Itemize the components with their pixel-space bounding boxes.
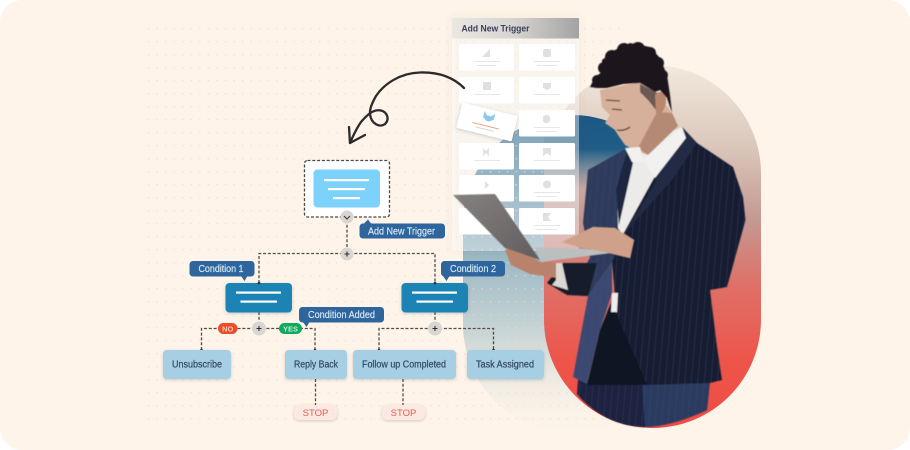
tooltip: add new trigger xyxy=(360,220,445,238)
node: unsubscribe xyxy=(163,350,231,379)
blue arch backdrop xyxy=(463,115,681,433)
trigger node xyxy=(304,160,390,217)
trousers xyxy=(577,380,710,427)
panel heading: Add New Trigger xyxy=(462,24,530,34)
panel header xyxy=(452,18,579,38)
card icons and lines xyxy=(474,49,560,230)
collar xyxy=(625,147,644,163)
eye and brow xyxy=(606,100,622,110)
node: reply back xyxy=(285,350,347,379)
red gradient pill backdrop xyxy=(544,65,761,428)
flow connectors xyxy=(202,220,494,405)
tooltip: condition added xyxy=(299,307,384,327)
left jacket panel xyxy=(573,262,612,384)
tooltip: condition 2: Condition 2 xyxy=(450,264,496,275)
jacket right body xyxy=(612,127,746,385)
node: task assigned: Task Assigned xyxy=(476,360,534,370)
left hand xyxy=(505,246,558,278)
node: follow up completed: Follow up Completed xyxy=(362,360,446,370)
panel body xyxy=(452,18,579,251)
ear xyxy=(655,92,666,113)
photo: businessman with laptop xyxy=(453,42,746,427)
node: unsubscribe: Unsubscribe xyxy=(172,360,222,370)
condition node 1 xyxy=(226,283,292,312)
smile xyxy=(617,127,630,130)
dark gap under jacket xyxy=(587,300,647,385)
dotted grid xyxy=(148,28,623,425)
no badge: NO xyxy=(222,324,233,334)
node: task assigned xyxy=(467,350,544,379)
neck shadow xyxy=(638,112,678,155)
laptop base xyxy=(535,247,610,262)
curved hand-drawn arrow xyxy=(349,72,464,143)
chevron button xyxy=(340,210,354,224)
trigger cards xyxy=(459,44,575,234)
plus button top xyxy=(340,248,354,260)
left sleeve xyxy=(547,263,597,296)
shirt at waist xyxy=(611,293,618,312)
neck and face xyxy=(600,82,678,155)
tooltip: add new trigger: Add New Trigger xyxy=(368,226,436,238)
tooltip: condition 2 xyxy=(441,261,505,281)
trigger card lines xyxy=(324,179,369,199)
stop badge left: STOP xyxy=(303,408,328,419)
plus button left xyxy=(252,322,266,336)
stop badge right xyxy=(382,405,425,420)
stop badge left xyxy=(294,405,337,420)
plus button right xyxy=(428,322,442,336)
jacket left chest xyxy=(567,148,627,296)
left lapel xyxy=(616,150,633,225)
tooltip: condition 1 xyxy=(190,261,254,281)
no badge xyxy=(218,323,238,334)
floating selected card xyxy=(456,102,518,142)
laptop lid xyxy=(453,194,540,260)
node: reply back: Reply Back xyxy=(294,360,339,370)
stop badge right: STOP xyxy=(391,408,416,419)
dashed trigger frame xyxy=(304,160,390,217)
panel: add new trigger xyxy=(452,18,579,251)
tooltip: condition 1: Condition 1 xyxy=(198,264,244,275)
right hand xyxy=(562,227,634,258)
curly hair xyxy=(590,42,672,113)
shirt xyxy=(617,127,688,236)
blue arch top overlap xyxy=(544,115,630,188)
node: follow up completed xyxy=(353,350,456,379)
shirt cuff xyxy=(552,263,568,290)
trigger card xyxy=(314,170,380,208)
connector dots xyxy=(200,282,495,351)
yes badge: YES xyxy=(283,324,298,334)
yes badge xyxy=(279,323,302,334)
tooltip: condition added: Condition Added xyxy=(308,310,375,321)
temple fade xyxy=(640,84,657,110)
right lapel xyxy=(623,127,697,235)
condition node 2 xyxy=(402,283,468,312)
